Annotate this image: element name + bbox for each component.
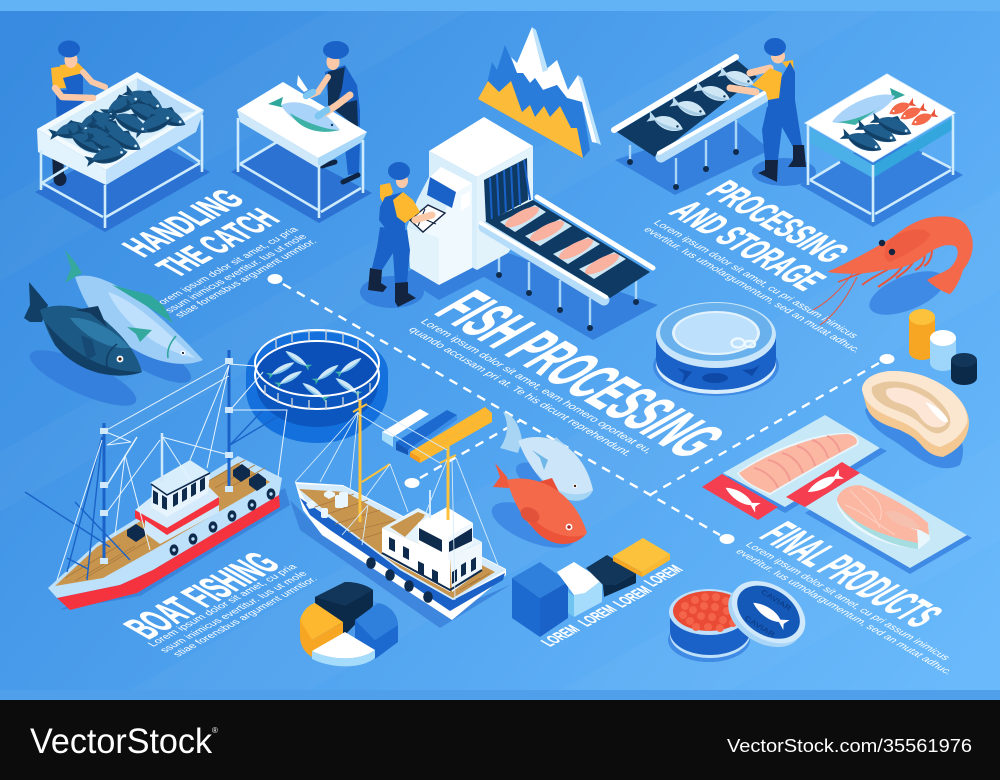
icon: 3D pie chart [300, 582, 398, 666]
icon: mountain area chart [478, 27, 601, 158]
crates [127, 464, 266, 542]
big fish on display [832, 88, 905, 125]
block chart labels [537, 563, 687, 649]
icon: large pale tuna [65, 250, 203, 392]
icon: trawler boat [290, 400, 510, 628]
text block: handling the catch: stiae forensbus argument umntior. [172, 237, 320, 319]
icon: oyster [862, 371, 969, 468]
footer logo text: VectorStock [30, 722, 212, 761]
white cylinder [930, 330, 956, 371]
small fish in cage [266, 348, 363, 403]
worker at sorting conveyor [730, 38, 816, 186]
salmon fillet package [702, 415, 887, 520]
worker sorting fish [51, 40, 87, 186]
icon: caviar jar [668, 589, 750, 662]
can fish pattern [677, 365, 760, 384]
fish on cutting table [268, 97, 340, 132]
deck cargo [306, 490, 348, 518]
navy cylinder [951, 353, 977, 385]
text block: fish processing: quando accusam pri at. Te his dicunt reprehendunt. [405, 325, 635, 458]
tyres [366, 557, 433, 603]
portholes [170, 488, 275, 556]
icon: red fish [486, 463, 587, 557]
dark fish on display [839, 108, 916, 156]
text block: final products: Lorem ipsum dolor sit amet, cu pri assum inimicus [742, 541, 952, 662]
machine housing [429, 117, 533, 270]
text block: processing and storage: evertitur. Ius utmolargumentum, sed an mutat adhuc. [640, 226, 863, 355]
text block: handling the catch: ssum inimicus evertitur. Ius ut mole [162, 232, 310, 314]
knife and worker arms [297, 75, 350, 116]
registered mark: ® [212, 726, 218, 735]
icon: stacked block chart [512, 538, 670, 637]
icon: shrimp [813, 216, 973, 325]
red fish on display [887, 98, 939, 128]
text block: boat fishing: ssum inimicus evertitur. Ius ut mole [157, 569, 310, 654]
panel: handling the catch tables [35, 40, 372, 232]
conveyor belt [481, 197, 653, 300]
icon: fish farm cage [246, 330, 388, 443]
yellow block [613, 538, 670, 577]
yellow cylinder [909, 309, 935, 360]
block chart labels: LOREM [574, 603, 621, 629]
block chart labels: LOREM [609, 584, 656, 610]
icon: caviar lid: CAVIAR [759, 589, 792, 613]
salmon trays on belt [500, 203, 626, 279]
text block: final products: evertitur. Ius utmolargumentum, sed an mutat adhuc. [732, 548, 955, 677]
icon: fishing boat [25, 350, 290, 610]
yellow slice [300, 603, 343, 657]
deck [55, 463, 270, 586]
superstructure [382, 507, 482, 592]
masts and rigging [25, 350, 277, 580]
text block: boat fishing: stiae forensbus argument umntior. [170, 575, 321, 658]
table with pile of dark fish [35, 40, 210, 232]
heading: handling the catch: THE CATCH [148, 204, 289, 282]
icon: fish tin can [653, 302, 779, 396]
worker arms on table rim [55, 72, 105, 98]
white block [557, 562, 602, 617]
icon: caviar lid [717, 568, 817, 660]
navy block [586, 555, 636, 597]
control console [407, 167, 472, 285]
block chart labels: LOREM [537, 623, 584, 649]
icon: cylinder chart [909, 309, 977, 385]
display table with fish [800, 74, 963, 227]
white slice [312, 632, 375, 666]
heading: handling the catch [114, 184, 289, 282]
icon: pale fish [500, 412, 593, 501]
icon: caviar lid: CAVIAR [743, 615, 776, 639]
deck [299, 489, 495, 598]
dashed connector lines [283, 284, 879, 535]
panel: processing and storage equipment [614, 38, 963, 227]
heading: processing and storage: PROCESSING [697, 175, 858, 269]
conveyor legs [499, 245, 636, 328]
worker cutting fish [322, 41, 360, 182]
text block: processing and storage: Lorem ipsum dolor sit amet, cu pri assum inimicus [650, 219, 860, 340]
fish pile [47, 80, 190, 169]
hull [48, 456, 282, 598]
heading: processing and storage: AND STORAGE [660, 195, 834, 296]
icon: stacked bar chart behind trawler [382, 407, 492, 463]
fish on sorting belt [646, 66, 756, 134]
blue block [512, 562, 568, 637]
hull [295, 482, 506, 620]
sorting conveyor with fish [614, 57, 770, 195]
worker at control console [360, 162, 432, 308]
yellow masts and rigging [295, 400, 500, 600]
salmon steak package [786, 462, 972, 574]
icon: large dark tuna [24, 282, 142, 416]
navy slice [315, 582, 373, 635]
text block: fish processing: Lorem ipsum dolor sit amet, eam homero oporteat eu, [417, 317, 656, 455]
heading: handling the catch: HANDLING [114, 184, 254, 262]
footer image id: VectorStock.com/35561976 [727, 736, 972, 756]
red label with fish [702, 474, 778, 520]
blue slice [355, 603, 398, 659]
can ring pull [732, 338, 755, 348]
connector dots [268, 274, 894, 544]
text block: boat fishing: Lorem ipsum dolor sit amet, cu pria [145, 562, 300, 648]
text block: handling the catch: orem ipsum dolor sit amet, cu pria [155, 225, 301, 306]
heading: boat fishing: BOAT FISHING [114, 546, 291, 645]
panel: processing machine and conveyor [360, 117, 658, 340]
heading: processing and storage [660, 175, 858, 296]
panel: packaged fish products [702, 415, 972, 574]
cabin [135, 460, 220, 544]
footer bar [0, 700, 1000, 780]
block chart labels: LOREM [640, 563, 687, 589]
caviar eggs [679, 593, 742, 632]
red label with fish [786, 462, 860, 507]
cutting table with fish [231, 41, 372, 223]
